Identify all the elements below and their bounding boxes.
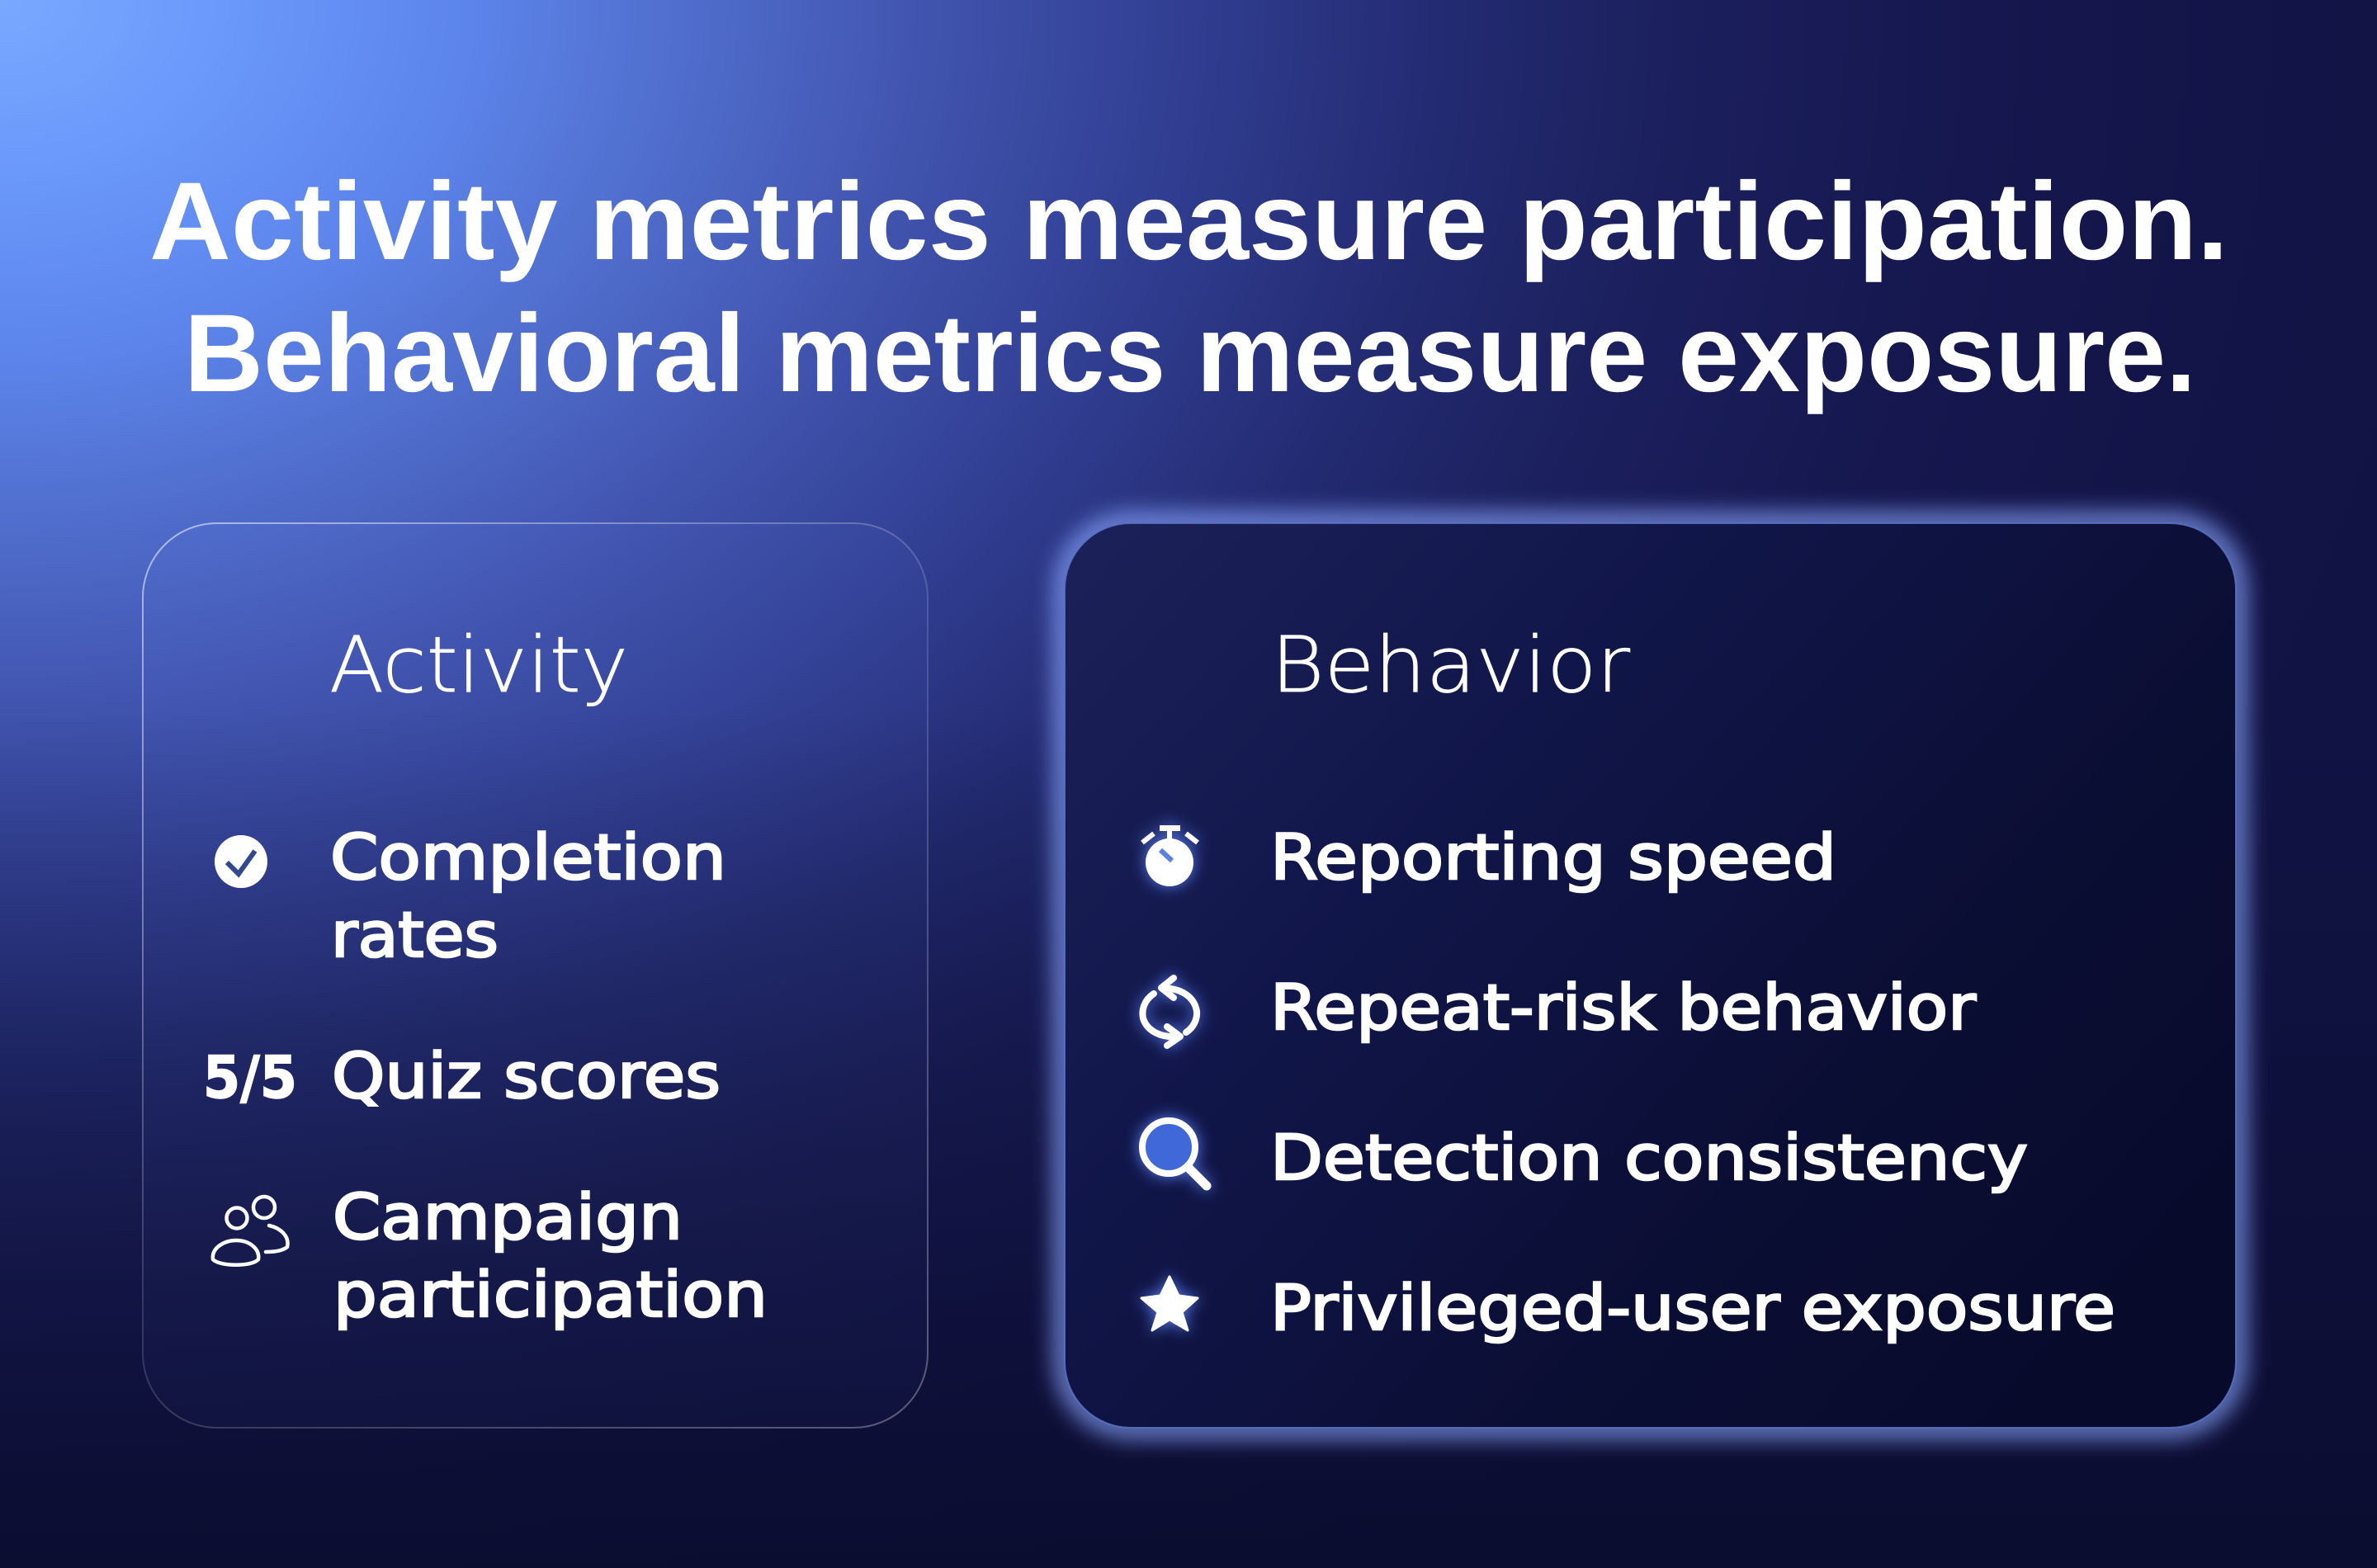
- icon: check circle: [215, 835, 267, 888]
- item: completion rates: [330, 820, 726, 971]
- icon: people: [213, 1197, 287, 1265]
- item: quiz scores: Quiz scores: [332, 1039, 721, 1112]
- item: privileged-user exposure: Privileged-user exposure: [1270, 1271, 2115, 1344]
- panel: activity: [143, 523, 928, 1428]
- icon: star: [1141, 1277, 1198, 1330]
- icon: stopwatch: [1142, 825, 1198, 886]
- heading: activity: Activity: [329, 621, 628, 711]
- item: campaign participation: Campaign: [333, 1180, 683, 1254]
- item: campaign participation: [333, 1180, 768, 1331]
- title: Activity metrics measure participation.: [149, 160, 2228, 283]
- icon: refresh arrows: [1142, 978, 1197, 1046]
- item: campaign participation: participation: [333, 1258, 768, 1331]
- item: repeat-risk behavior: Repeat-risk behavior: [1270, 971, 1977, 1044]
- title: Behavioral metrics measure exposure.: [184, 292, 2196, 415]
- item: completion rates: Completion: [330, 820, 726, 894]
- item: detection consistency: Detection consistency: [1270, 1121, 2028, 1194]
- icon: 5/5 score: 5/5: [203, 1044, 297, 1112]
- heading: behavior: Behavior: [1271, 621, 1630, 711]
- title: [149, 160, 2228, 415]
- icon: magnifier: [1142, 1121, 1207, 1186]
- item: completion rates: rates: [331, 898, 499, 971]
- item: reporting speed: Reporting speed: [1270, 820, 1836, 894]
- panel: behavior: [1065, 523, 2236, 1428]
